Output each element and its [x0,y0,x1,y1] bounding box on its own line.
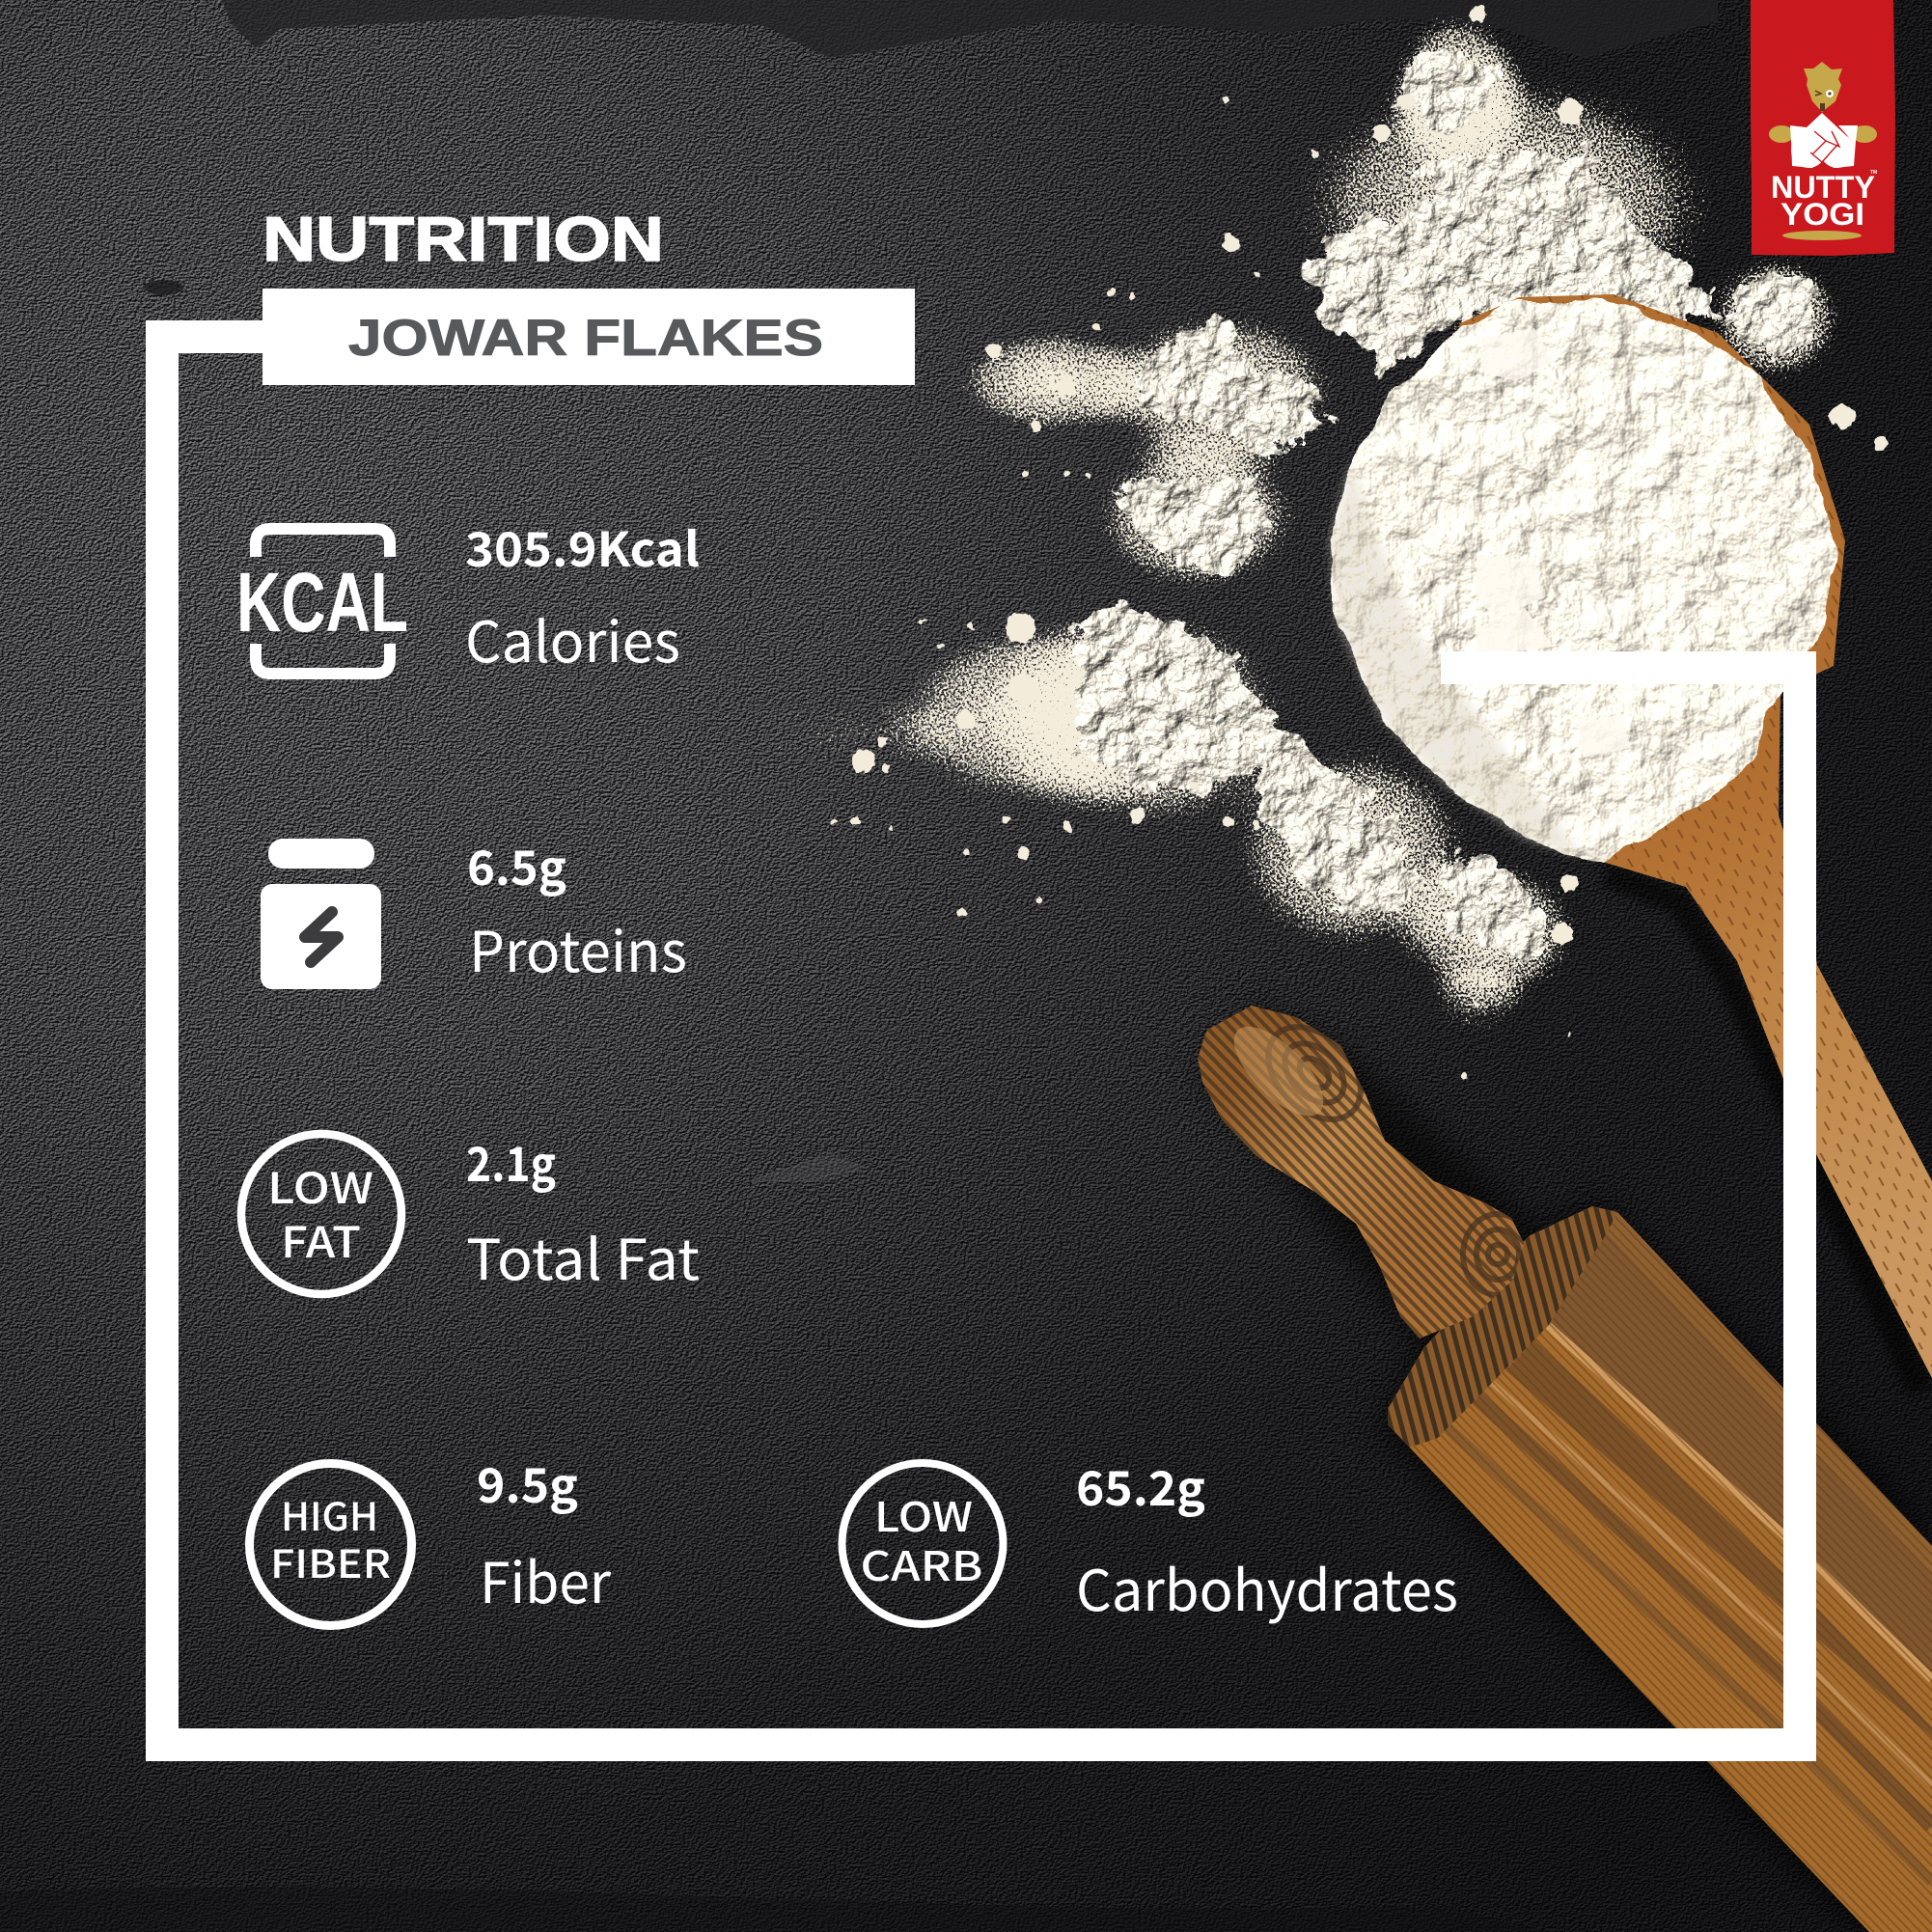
logo wordmark: YOGI [1780,197,1864,232]
wooden spoon [1448,294,1932,1390]
title banner: JOWAR FLAKES: JOWAR FLAKES [348,310,823,367]
icon: high fiber badge: HIGH [281,1486,378,1542]
icon: low carb badge: LOW [874,1485,973,1544]
white frame [146,320,1816,1761]
flour piles [1071,47,1816,955]
total fat value: 2.1g [466,1127,556,1196]
icon: low fat badge: FAT [281,1208,361,1270]
pin handle [1198,1006,1524,1339]
icon: high fiber badge [249,1463,411,1625]
row: carbohydrates [842,1451,1458,1627]
logo background [1751,0,1895,256]
row: calories [236,512,700,678]
rolling pin [1187,994,1932,1932]
logo wordmark: NUTTY [1771,170,1875,205]
logo head [1804,62,1842,112]
logo: Nutty Yogi red tag [1751,0,1895,256]
logo wordmark [1771,170,1877,232]
logo wordmark: TM [1870,170,1877,176]
calories label: Calories [465,597,680,678]
pin body [1380,1197,1932,1932]
carbohydrates label: Carbohydrates [1076,1546,1458,1627]
heading: NUTRITION: NUTRITION [262,204,664,274]
icon: low carb badge: CARB [861,1534,982,1593]
logo knot body [1790,113,1858,168]
title banner: JOWAR FLAKES [262,289,915,385]
carbohydrates value: 65.2g [1076,1451,1205,1520]
fiber label: Fiber [480,1538,611,1619]
row: total fat [241,1127,700,1296]
icon: low fat badge [241,1134,401,1294]
logo gold base [1782,231,1862,240]
spoon shadow [1606,873,1920,1390]
icon: protein jar [261,839,381,989]
icon: high fiber badge: FIBER [270,1533,391,1589]
powder dust haloes [724,0,1858,1047]
flour crumbs [831,5,1888,1080]
proteins label: Proteins [469,907,687,988]
row: proteins [261,831,687,989]
icon: low carb badge [842,1463,1004,1624]
row: fiber [249,1449,611,1625]
flour in spoon [1330,301,1838,863]
logo hands [1769,125,1877,143]
fiber value: 9.5g [477,1449,578,1517]
pin shadow [1197,1004,1920,1932]
icon: kcal: KCAL [236,556,408,649]
icon: low fat badge: LOW [267,1154,373,1216]
total fat label: Total Fat [466,1215,700,1296]
spoon bowl and handle [1448,294,1932,1378]
proteins value: 6.5g [467,831,566,899]
calories value: 305.9Kcal [465,512,700,581]
icon: kcal [236,529,408,674]
